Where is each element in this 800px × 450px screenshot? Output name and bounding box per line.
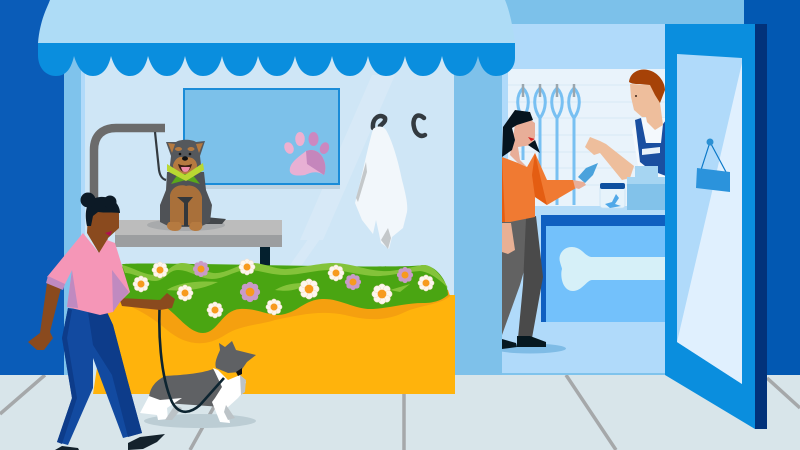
head (166, 140, 205, 177)
bandana (171, 174, 200, 184)
paws (167, 222, 202, 231)
woman at counter (502, 110, 598, 338)
hanging leashes (518, 84, 579, 205)
head and neck (87, 210, 119, 253)
card (578, 163, 598, 183)
body (160, 172, 212, 227)
counter (535, 206, 666, 322)
door glass (677, 54, 742, 384)
paw print (282, 132, 331, 176)
hair (502, 110, 540, 157)
storefront (64, 40, 502, 394)
head (510, 118, 535, 167)
grooming table (115, 219, 282, 266)
pointing arm (585, 137, 634, 180)
bone (560, 247, 666, 291)
cash register (627, 166, 666, 210)
interior of shop (500, 24, 666, 375)
pink shirt (47, 233, 130, 315)
left arm (28, 283, 62, 350)
shirt (632, 118, 666, 178)
white robe (355, 126, 407, 249)
hand holding hip (502, 223, 515, 254)
sidewalk (0, 370, 800, 450)
floor shadow under woman (494, 344, 566, 354)
woman walking (28, 192, 175, 450)
trousers (57, 308, 142, 445)
orange top (502, 153, 576, 222)
right arm (119, 293, 175, 310)
picture frame with paw (184, 89, 340, 189)
grooming arm (94, 128, 166, 200)
awning (38, 0, 515, 76)
window reflection (300, 75, 395, 240)
shoes (128, 434, 165, 450)
man behind the counter (585, 70, 666, 210)
open door (665, 24, 767, 429)
hanging sign (696, 138, 730, 192)
apron (635, 118, 666, 176)
walking dog (140, 341, 256, 428)
leash (159, 300, 224, 412)
hair (629, 70, 665, 103)
floor edge (500, 373, 666, 375)
back wall with stripes (508, 69, 666, 209)
trousers (502, 215, 535, 335)
coat hooks (373, 115, 425, 136)
woman's shoes (502, 336, 546, 349)
flowers (133, 259, 434, 318)
dog on table (160, 140, 226, 231)
tail (205, 217, 226, 224)
treat jar (600, 183, 625, 208)
neck and face (630, 84, 663, 130)
planter box (93, 259, 455, 394)
